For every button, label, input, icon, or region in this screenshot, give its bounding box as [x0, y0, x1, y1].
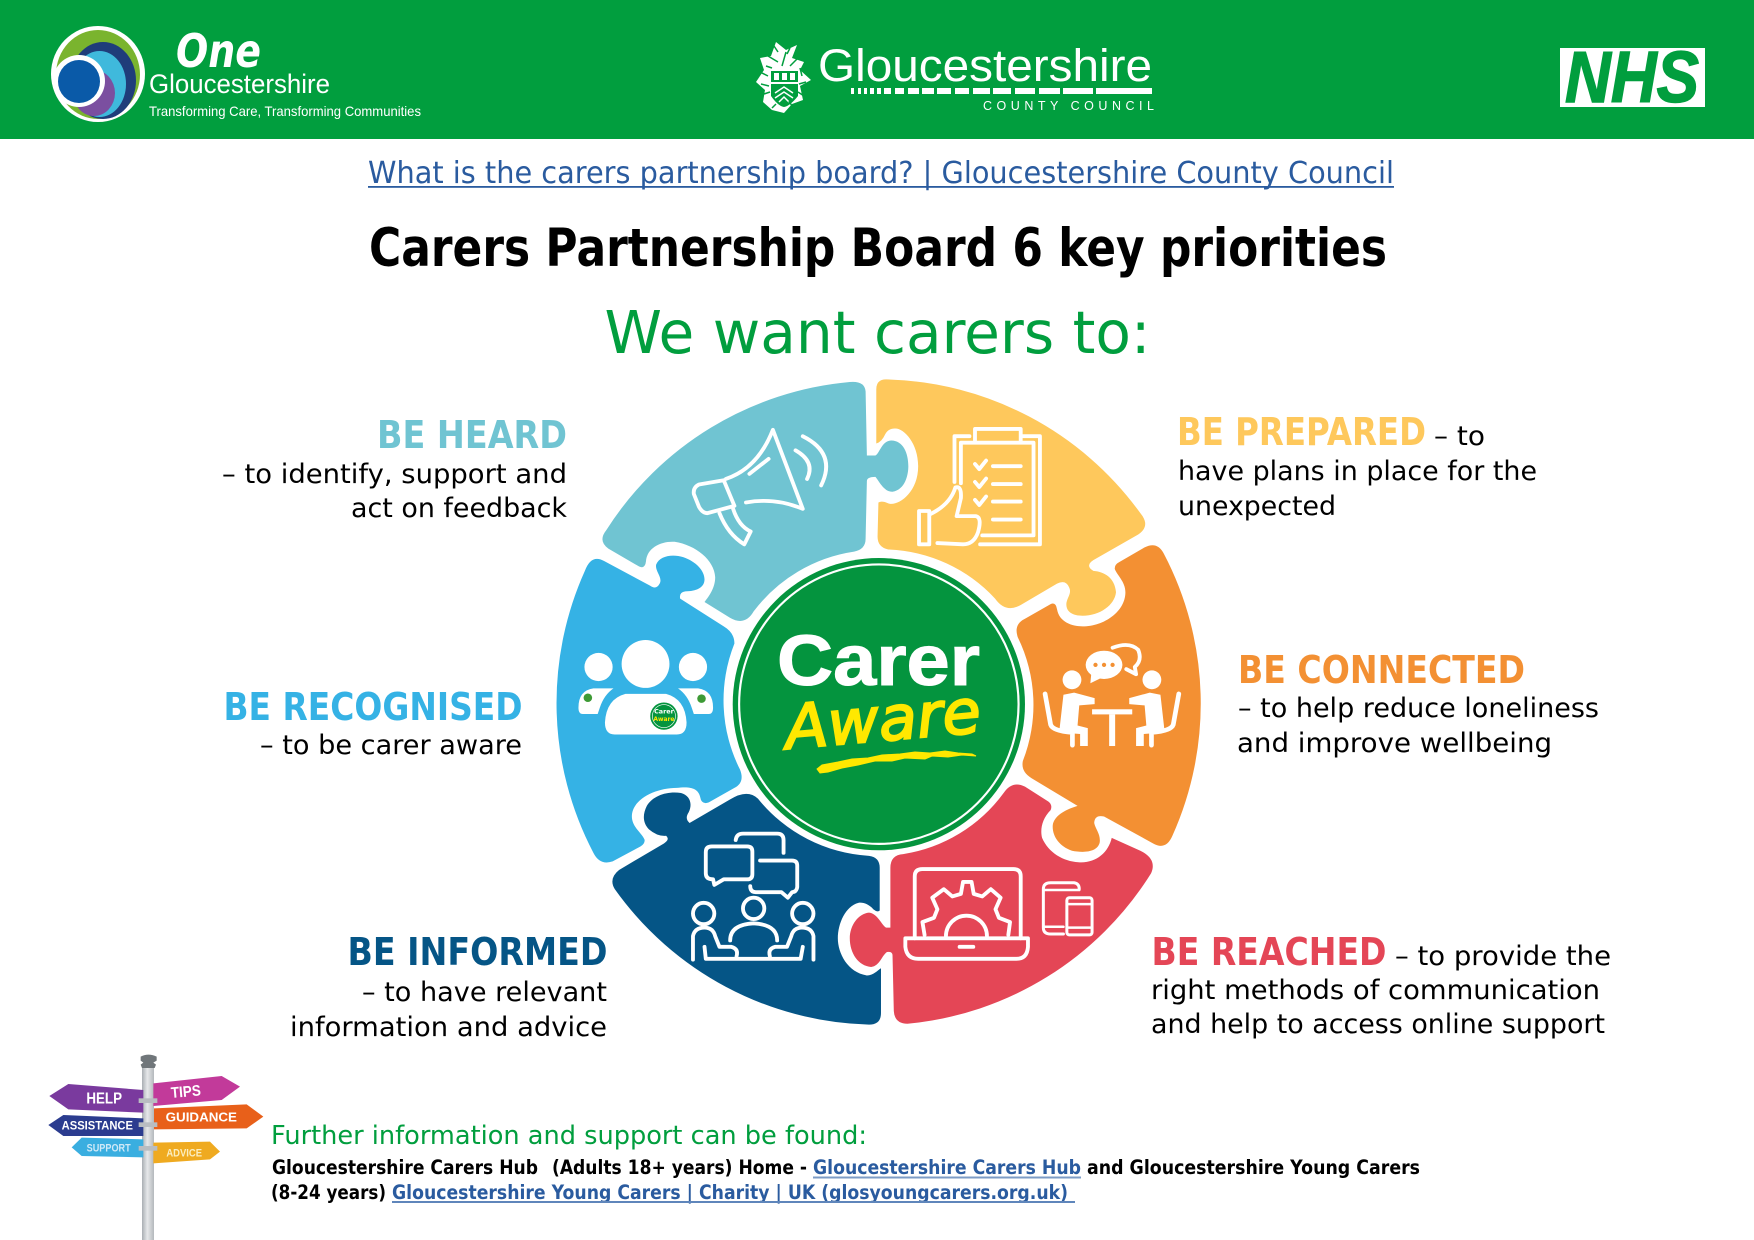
text: be prepared	[1177, 410, 1537, 522]
logo: Gloucestershire County Council: Gloucestershire	[818, 40, 1152, 91]
footer line one: (Adults 18+ years) Home -	[552, 1156, 807, 1179]
text: be informed	[290, 930, 608, 1043]
text: be connected: BE CONNECTED	[1238, 648, 1525, 693]
logo: NHS: NHS	[1565, 38, 1699, 118]
text: be recognised	[224, 685, 522, 761]
footer line one: and Gloucestershire Young Carers	[1087, 1156, 1420, 1179]
icon: megaphone	[694, 430, 826, 544]
text: be heard: BE HEARD	[377, 413, 567, 458]
text: be connected: – to help reduce loneliness	[1238, 693, 1599, 724]
dashed bar	[851, 88, 1152, 94]
icon: signpost: ASSISTANCE	[62, 1118, 133, 1132]
logo: One Gloucestershire: Transforming Care, Transforming Communities	[149, 103, 421, 119]
icon: checklist and thumbs up	[919, 429, 1040, 544]
subtitle: We want carers to:	[604, 298, 1150, 367]
text: be reached: – to provide the	[1395, 941, 1611, 972]
text: be connected	[1237, 648, 1599, 759]
badge text: Carer Aware: Aware	[778, 676, 984, 764]
text: be reached: and help to access online support	[1151, 1009, 1605, 1040]
title: Carers Partnership Board 6 key priorities	[369, 218, 1387, 279]
icon: signpost: HELP	[86, 1090, 122, 1107]
text: be heard: act on feedback	[351, 493, 567, 524]
footer: further information: Further information and support can be found:	[271, 1121, 867, 1151]
text: be reached: right methods of communication	[1151, 975, 1600, 1006]
text: be recognised: BE RECOGNISED	[224, 685, 522, 730]
panel: teal piece, be heard	[602, 382, 908, 621]
footer line two: (8-24 years)	[271, 1181, 386, 1204]
panel: yellow piece, be prepared	[876, 379, 1145, 616]
text: be prepared: BE PREPARED	[1177, 410, 1426, 455]
panel: blue piece, be recognised	[557, 556, 742, 862]
badge: green circle	[733, 558, 1025, 850]
badge text: Carer Aware: Carer	[777, 622, 980, 701]
logo: Gloucestershire County Council: COUNTY COUNCIL	[983, 99, 1154, 113]
footer line one: Gloucestershire Carers Hub	[813, 1156, 1081, 1179]
text: be heard: – to identify, support and	[222, 459, 567, 490]
logo: One Gloucestershire: Gloucestershire	[149, 69, 330, 99]
footer line one: Gloucestershire Carers Hub	[272, 1156, 538, 1179]
text: be reached	[1151, 930, 1611, 1040]
icon: county crest	[756, 42, 811, 113]
text: be reached: BE REACHED	[1152, 930, 1386, 975]
text: be informed: – to have relevant	[362, 977, 607, 1008]
icon: signpost	[48, 1055, 263, 1240]
text: be recognised: – to be carer aware	[260, 730, 522, 761]
text: be prepared: unexpected	[1178, 491, 1336, 522]
logo: Gloucestershire County Council	[756, 40, 1154, 113]
text: be informed: information and advice	[290, 1012, 607, 1043]
text: be prepared: have plans in place for the	[1178, 456, 1537, 487]
text: be informed: BE INFORMED	[348, 930, 608, 975]
logo: One Gloucestershire: One	[176, 24, 261, 78]
panel: red piece, be reached	[850, 784, 1153, 1024]
icon: signpost: GUIDANCE	[166, 1111, 237, 1125]
puzzle wheel	[557, 379, 1201, 1025]
header band	[0, 0, 1754, 139]
footer line two: Gloucestershire Young Carers | Charity | UK (glosyoungcarers.org.uk)	[392, 1181, 1068, 1204]
text: be connected: and improve wellbeing	[1237, 728, 1552, 759]
badge text: Carer Aware	[777, 622, 984, 773]
icon: signpost: ADVICE	[166, 1148, 202, 1160]
panel: navy piece, be informed	[612, 792, 881, 1025]
icon: laptop with gear and devices	[905, 869, 1092, 959]
icon: group discussion	[693, 834, 813, 960]
icon: signpost: TIPS	[170, 1082, 202, 1102]
icon: three people with carer aware badge: Aware	[653, 716, 674, 723]
icon: two people at table talking	[1045, 645, 1179, 746]
panel: orange piece, be connected	[1017, 545, 1201, 852]
icon: three people with carer aware badge: Carer	[654, 708, 675, 716]
footer line one	[272, 1156, 1420, 1179]
icon: three people with carer aware badge	[578, 640, 713, 734]
link: carers partnership board: What is the carers partnership board? | Gloucestershire County Council	[368, 156, 1394, 191]
text: be heard	[222, 413, 567, 524]
logo: One Gloucestershire	[51, 24, 421, 122]
icon: signpost: SUPPORT	[87, 1143, 131, 1155]
text: be prepared: – to	[1434, 421, 1485, 452]
footer: further information	[271, 1121, 1420, 1204]
